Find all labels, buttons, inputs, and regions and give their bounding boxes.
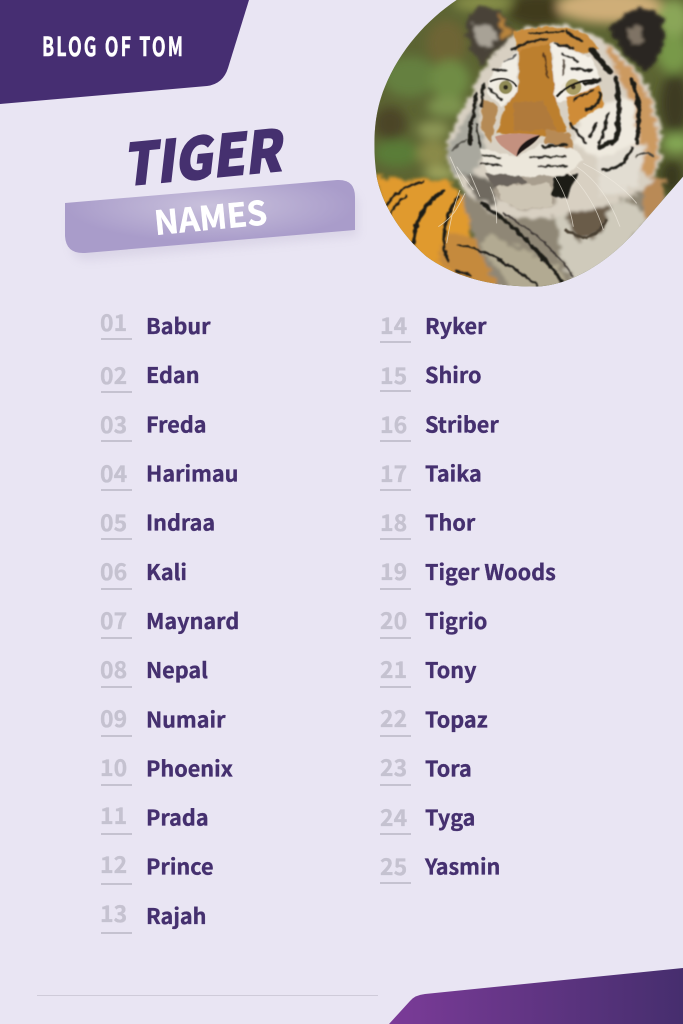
name 25 [380, 848, 500, 884]
name 10 [100, 749, 233, 786]
subtitle: names: NAMES [152, 186, 269, 245]
names ribbon [65, 180, 358, 260]
name 05: Indraa [146, 507, 215, 538]
name 24: Tyga [425, 802, 475, 833]
name 20: 20 [380, 602, 407, 636]
name 07: 07 [100, 602, 127, 636]
name 22: 22 [380, 700, 407, 734]
brand banner [0, 0, 249, 104]
name 18: Thor [425, 507, 476, 538]
name 18 [380, 504, 476, 540]
name 14 [380, 307, 487, 343]
chin [490, 173, 557, 210]
name 22 [380, 700, 488, 737]
name 06 [100, 553, 187, 590]
name 19: Tiger Woods [425, 556, 556, 587]
name 21: 21 [380, 651, 407, 685]
name 15: 15 [380, 357, 407, 391]
name 13 [100, 895, 207, 934]
face colours [480, 27, 603, 210]
name 24 [380, 799, 475, 835]
stripes [385, 32, 653, 287]
title: tiger: TIGER [122, 103, 290, 203]
name 12: 12 [100, 846, 127, 880]
name 02: 02 [100, 357, 127, 391]
name 21 [380, 651, 477, 688]
name 20: Tigrio [425, 605, 487, 636]
name 01: 01 [100, 304, 127, 338]
brand name: BLOG OF TOM [42, 27, 185, 64]
name 01 [100, 304, 211, 341]
name 02: Edan [146, 359, 200, 390]
name 10: 10 [100, 749, 127, 783]
name 25: Yasmin [424, 851, 500, 882]
head [447, 25, 662, 219]
foliage [373, 0, 683, 193]
name 16: 16 [380, 406, 407, 440]
name 16 [380, 406, 499, 442]
name 19: 19 [380, 553, 407, 587]
name 03: Freda [146, 408, 207, 439]
name 05: 05 [100, 504, 127, 538]
name 09: 09 [100, 700, 127, 734]
name 12: Prince [146, 851, 214, 882]
name 17: Taika [425, 458, 482, 488]
name 22: Topaz [425, 703, 488, 734]
name 09 [100, 700, 226, 737]
name 06: Kali [146, 556, 187, 587]
name list: left column [100, 304, 239, 934]
name 10: Phoenix [146, 752, 233, 783]
footer rule [37, 995, 378, 996]
tiger photo [370, 0, 683, 295]
name 13: Rajah [146, 900, 207, 931]
name 08 [100, 651, 208, 688]
name 25: 25 [380, 848, 407, 882]
name 15 [380, 357, 482, 392]
name 15: Shiro [425, 359, 482, 390]
name 12 [100, 846, 214, 885]
name 17 [380, 455, 482, 491]
name 21: Tony [425, 654, 477, 685]
name 05 [100, 504, 215, 540]
name 09: Numair [146, 703, 226, 734]
footer corner shape [389, 968, 683, 1024]
name 17: 17 [380, 455, 407, 489]
whiskers [438, 157, 637, 243]
name 18: 18 [380, 504, 407, 538]
name 01: Babur [146, 310, 211, 341]
name 23 [380, 749, 472, 786]
name 08: Nepal [146, 654, 208, 685]
ears [466, 7, 665, 72]
nose and eyes [490, 79, 597, 157]
name 16: Striber [425, 408, 499, 439]
name 11: 11 [100, 797, 127, 831]
name 08: 08 [100, 651, 127, 685]
name 14: 14 [380, 307, 407, 341]
name 24: 24 [380, 799, 407, 833]
name 14: Ryker [425, 310, 487, 341]
name 11 [100, 797, 209, 835]
name 23: 23 [380, 749, 407, 783]
name 03 [100, 406, 207, 442]
name list: right column [380, 307, 556, 884]
name 07: Maynard [146, 605, 239, 636]
name 11: Prada [146, 802, 209, 833]
name 03: 03 [100, 406, 127, 440]
name 19 [380, 553, 556, 590]
name 04 [100, 455, 238, 491]
name 20 [380, 602, 487, 639]
name 02 [100, 357, 200, 393]
name 13: 13 [100, 895, 127, 929]
name 04: Harimau [146, 458, 238, 488]
name 04: 04 [100, 455, 127, 489]
name 23: Tora [425, 752, 472, 783]
fur base [375, 25, 667, 293]
name 07 [100, 602, 239, 639]
name 06: 06 [100, 553, 127, 587]
